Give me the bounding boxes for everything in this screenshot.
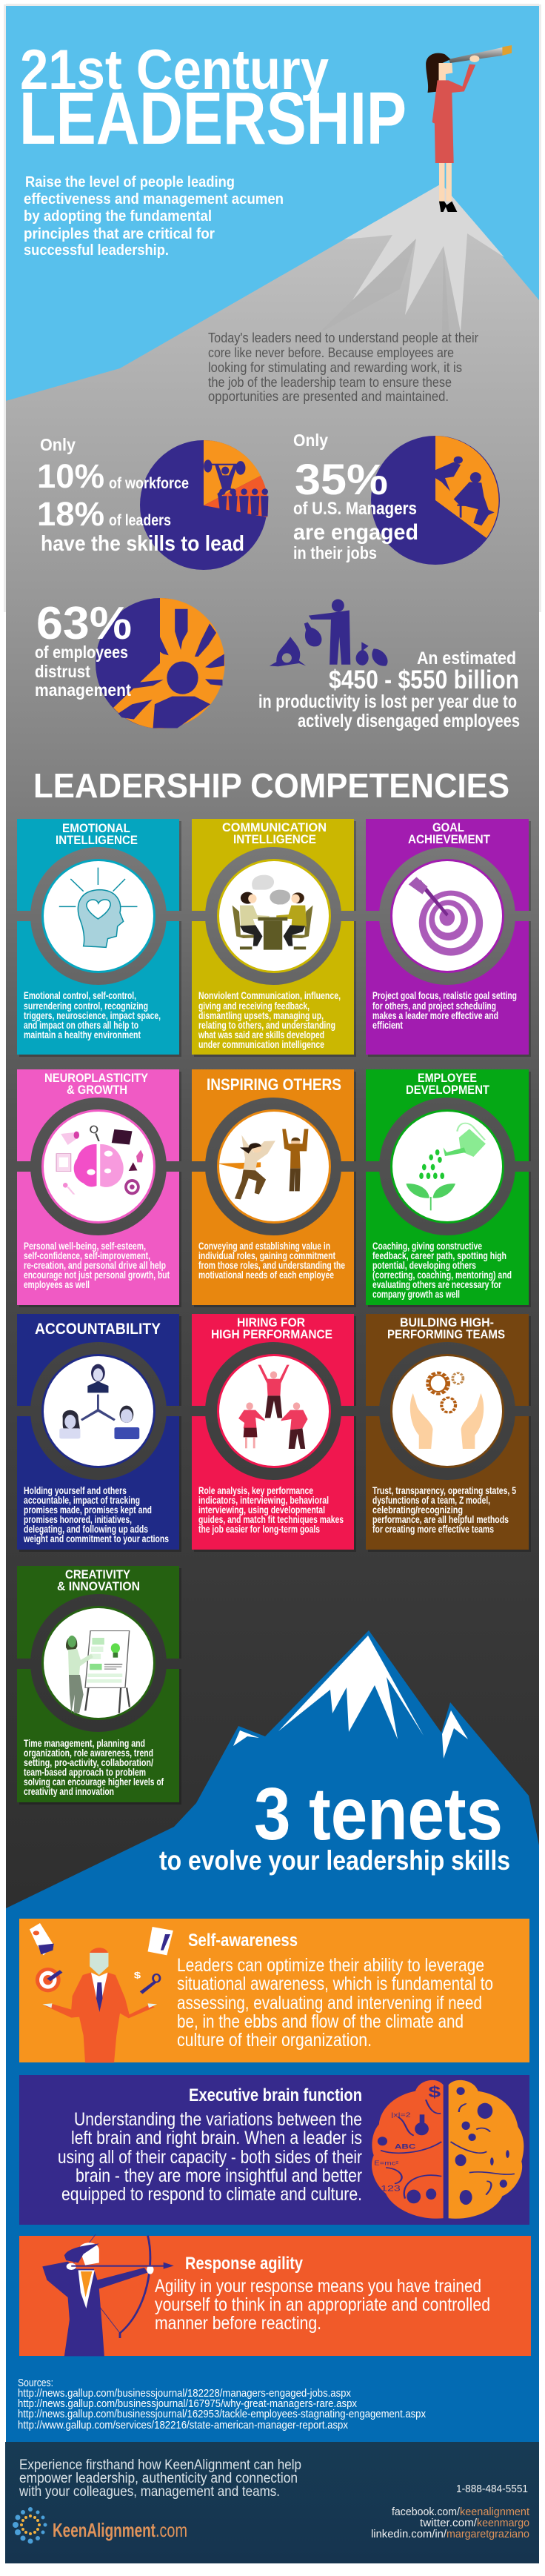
stat: 63%: of employees	[35, 643, 128, 662]
icon: disengaged figures	[435, 457, 495, 525]
body text: feedback, career path, spotting high	[372, 1250, 506, 1261]
icon: presenter at flipchart	[66, 1631, 130, 1713]
icon: two-sided brain: $	[428, 2082, 441, 2101]
body text: giving and receiving feedback,	[198, 1000, 310, 1012]
body text: makes a leader more effective and	[372, 1010, 498, 1021]
icon: two-sided brain: ABC	[395, 2143, 415, 2151]
body text: culture of their organization.	[177, 2030, 372, 2051]
heading: ACCOUNTABILITY	[35, 1321, 161, 1338]
body text: encourage not just personal growth, but	[24, 1269, 170, 1281]
sources: http://www.gallup.com/services/182216/state-american-manager-report.aspx	[18, 2419, 348, 2431]
body text: team-based approach to problem	[24, 1767, 146, 1778]
heading	[211, 1315, 332, 1341]
pie chart: skills to lead	[140, 440, 268, 570]
heading: BUILDING HIGH-	[400, 1315, 494, 1330]
heading: GOAL	[432, 820, 464, 834]
call to action	[19, 2457, 301, 2500]
intro text: Raise the level of people leading	[25, 174, 235, 190]
body text: creativity and innovation	[24, 1786, 114, 1797]
body text: Emotional control, self-control,	[24, 990, 136, 1001]
stat: 10% and 18%: have the skills to lead	[41, 532, 244, 556]
icon: archer	[42, 2234, 174, 2356]
intro text: principles that are critical for	[24, 226, 215, 242]
heading: & INNOVATION	[57, 1579, 140, 1593]
icon: watering can and plant	[406, 1123, 486, 1210]
body text: yourself to think in an appropriate and controlled	[155, 2294, 490, 2315]
body text	[23, 1485, 169, 1544]
body text: solving can encourage higher levels of	[24, 1776, 164, 1787]
stat: lost productivity: $450 - $550 billion	[329, 665, 519, 694]
body text: company growth as well	[372, 1289, 460, 1300]
heading	[222, 820, 327, 846]
stat: 10% and 18%	[37, 435, 244, 556]
panel: response agility	[19, 2234, 531, 2356]
body text: Time management, planning and	[24, 1738, 145, 1749]
body text: employees as well	[24, 1279, 90, 1290]
stat: 10% and 18%: of leaders	[109, 512, 171, 529]
call to action: empower leadership, authenticity and connection	[19, 2471, 298, 2486]
body text: Holding yourself and others	[24, 1485, 127, 1496]
heading: Executive brain function	[189, 2085, 362, 2105]
logo wordmark: KeenAlignment	[53, 2519, 156, 2541]
heading: 3 tenets	[159, 1773, 510, 1876]
social links: keenmargo	[477, 2517, 529, 2529]
intro text: by adopting the fundamental	[24, 208, 212, 225]
body text	[24, 1241, 170, 1290]
panel: hiring for high performance	[192, 1314, 356, 1552]
body text: left brain and right brain. When a leader is	[71, 2128, 362, 2148]
body text: Role analysis, key performance	[198, 1485, 313, 1496]
panel: footer	[5, 2442, 539, 2563]
body text	[198, 1241, 345, 1281]
intro text	[24, 174, 284, 259]
body text: Understanding the variations between the	[74, 2109, 362, 2130]
heading: PERFORMING TEAMS	[387, 1327, 505, 1341]
call to action: Experience firsthand how KeenAlignment can help	[19, 2457, 301, 2473]
heading: HIRING FOR	[237, 1315, 305, 1330]
grey paragraph: the job of the leadership team to ensure these	[208, 375, 452, 390]
heading: INSPIRING OTHERS	[207, 1075, 341, 1094]
stat: 35%: of U.S. Managers	[293, 499, 417, 519]
icon: target and arrow	[409, 877, 483, 956]
icon: human pyramid	[238, 1365, 308, 1449]
body text: guides, and match fit techniques makes	[198, 1514, 344, 1525]
icon: two-sided brain: |x|=2	[391, 2111, 411, 2119]
body text: for others, and project scheduling	[372, 1000, 496, 1012]
sources: http://news.gallup.com/businessjournal/162953/tackle-employees-stagnating-engagement.aspx	[18, 2408, 426, 2420]
stat: 35%: are engaged	[293, 520, 418, 545]
body text: potential, developing others	[372, 1260, 476, 1271]
body text: accountable, impact of tracking	[24, 1495, 140, 1506]
call to action: with your colleagues, management and teams.	[19, 2484, 280, 2500]
body text	[372, 1485, 516, 1535]
stat: 63%: distrust	[35, 662, 90, 681]
icon: head with heart	[59, 868, 137, 947]
panel: accountability	[17, 1314, 181, 1552]
heading: Self-awareness	[188, 1931, 298, 1951]
body text: individual roles, gaining commitment	[198, 1250, 335, 1261]
sources: http://news.gallup.com/businessjournal/167975/why-great-managers-rare.aspx	[18, 2397, 357, 2410]
panel: goal achievement	[366, 819, 531, 1057]
icon: businessman juggling objects	[30, 1923, 173, 2062]
panel: creativity and innovation	[17, 1566, 181, 1805]
panel: building high-performing teams	[366, 1314, 531, 1552]
body text	[198, 990, 341, 1050]
grey paragraph: opportunities are presented and maintained.	[208, 389, 449, 404]
intro text: effectiveness and management acumen	[24, 191, 284, 208]
body text	[155, 2276, 490, 2334]
body text: Agility in your response means you have trained	[155, 2276, 481, 2297]
title: LEADERSHIP	[19, 77, 407, 160]
body text	[372, 990, 517, 1031]
body text	[24, 1738, 164, 1797]
body text: setting, pro-activity, collaboration/	[24, 1757, 153, 1768]
heading	[387, 1315, 505, 1341]
stat: lost productivity: An estimated	[417, 648, 516, 668]
heading: INTELLIGENCE	[56, 833, 138, 847]
icon: brain and objects	[56, 1126, 143, 1195]
icon: celebrating people	[217, 1129, 308, 1199]
stat: lost productivity	[258, 648, 520, 731]
body text: delegating, and following up adds	[24, 1524, 148, 1535]
heading	[56, 821, 138, 847]
stat: 63%: 63%	[36, 598, 132, 649]
social links: facebook.com/	[392, 2506, 461, 2518]
body text: motivational needs of each employee	[198, 1269, 334, 1281]
icon: conversation at a table	[233, 875, 313, 950]
body text: surrendering control, recognizing	[24, 1000, 148, 1012]
panel: self-awareness	[19, 1919, 529, 2062]
stat: 10% and 18%: 18%	[37, 495, 104, 533]
icon: pointed-at manager	[118, 609, 224, 728]
heading: COMMUNICATION	[222, 820, 327, 834]
heading	[406, 1071, 490, 1097]
body text: interviewing, using developmental	[198, 1504, 325, 1516]
phone number: 1-888-484-5551	[456, 2483, 528, 2495]
pie chart: engaged managers	[371, 436, 500, 565]
body text: promises honored, initiatives,	[24, 1514, 132, 1525]
body text: Leaders can optimize their ability to leverage	[177, 1955, 484, 1976]
panel: inspiring others	[192, 1069, 356, 1307]
body text	[177, 1955, 493, 2051]
body text: evaluating others are necessary for	[372, 1279, 502, 1290]
body text: promises made, promises kept and	[24, 1504, 152, 1516]
sky background	[6, 6, 539, 421]
body text: indicators, interviewing, behavioral	[198, 1495, 329, 1506]
body text: brain - they are more insightful and better	[76, 2165, 362, 2186]
icon: gears held by hands	[410, 1372, 484, 1449]
heading: EMPLOYEE	[418, 1071, 477, 1085]
icon: three connected people	[59, 1364, 139, 1439]
panel: neuroplasticity and growth	[17, 1069, 181, 1307]
body text: the job easier for long-term goals	[198, 1524, 320, 1535]
body text: efficient	[372, 1020, 403, 1031]
body text: Personal well-being, self-esteem,	[24, 1241, 146, 1252]
body text: celebrating/recognizing	[372, 1504, 463, 1516]
social links	[371, 2506, 530, 2540]
body text: equipped to respond to climate and culture.	[61, 2184, 362, 2205]
heading	[57, 1567, 140, 1593]
body text: maintain a healthy environment	[24, 1029, 141, 1040]
blue mountain	[6, 1630, 539, 2446]
heading: HIGH PERFORMANCE	[211, 1327, 332, 1341]
icon: two-sided brain: 123	[381, 2183, 401, 2193]
body text: organization, role awareness, trend	[24, 1747, 153, 1759]
grey paragraph: looking for stimulating and rewarding work, it is	[208, 360, 462, 375]
stat: 63%	[35, 598, 132, 700]
grey paragraph	[208, 331, 478, 404]
icon: two-sided brain: E=mc²	[374, 2160, 399, 2167]
social links: twitter.com/	[420, 2517, 478, 2529]
panel: executive brain function	[19, 2075, 529, 2225]
body text	[372, 1241, 512, 1300]
panel: emotional intelligence	[17, 819, 181, 1057]
body text: Conveying and establishing value in	[198, 1241, 330, 1252]
sources	[18, 2377, 426, 2431]
heading: Response agility	[185, 2254, 304, 2274]
body text: triggers, neuroscience, impact space,	[24, 1010, 161, 1021]
logo wordmark: .com	[156, 2519, 187, 2541]
heading	[408, 820, 491, 846]
stat: 35%	[293, 431, 418, 562]
social links: keenalignment	[460, 2506, 530, 2518]
body text: weight and commitment to your actions	[23, 1533, 169, 1544]
body text	[58, 2109, 362, 2205]
stat: 10% and 18%: of workforce	[109, 475, 189, 492]
body text: what was said are skills developed	[198, 1029, 324, 1040]
body text: manner before reacting.	[155, 2313, 321, 2334]
heading: ACHIEVEMENT	[408, 832, 491, 846]
body text: under communication intelligence	[198, 1039, 324, 1050]
intro text: successful leadership.	[24, 242, 169, 259]
heading: INTELLIGENCE	[233, 832, 316, 846]
social links: linkedin.com/in/	[371, 2528, 447, 2540]
heading: DEVELOPMENT	[406, 1083, 490, 1097]
heading: leadership competencies: LEADERSHIP COMPETENCIES	[33, 766, 509, 805]
body text: dysfunctions of a team, Z model,	[372, 1495, 490, 1506]
stat: 35%: Only	[293, 431, 328, 450]
page background gradient	[6, 419, 539, 1931]
body text: assessing, evaluating and intervening if need	[177, 1993, 482, 2014]
sources: http://news.gallup.com/businessjournal/182228/managers-engaged-jobs.aspx	[18, 2387, 351, 2400]
body text: Nonviolent Communication, influence,	[198, 990, 341, 1001]
stat: 35%: 35%	[295, 456, 388, 504]
title: 21st Century	[20, 39, 329, 102]
heading: & GROWTH	[67, 1083, 127, 1097]
grey paragraph: Today's leaders need to understand people at their	[208, 331, 478, 345]
heading: EMOTIONAL	[62, 821, 130, 835]
icon: two-sided brain	[372, 2080, 524, 2219]
heading	[44, 1071, 149, 1097]
icon: businessman juggling objects: $	[134, 1971, 141, 1981]
body text: Coaching, giving constructive	[372, 1241, 482, 1252]
stat: 63%: management	[35, 680, 131, 700]
body text: from those roles, and understanding the	[198, 1260, 345, 1271]
heading: NEUROPLASTICITY	[44, 1071, 149, 1085]
grey paragraph: core like never before. Because employees are	[208, 345, 454, 360]
social links: margaretgraziano	[447, 2528, 529, 2540]
stat: 10% and 18%: 10%	[37, 457, 104, 495]
sources: Sources:	[18, 2377, 53, 2389]
body text: using all of their capacity - both sides of their	[58, 2147, 362, 2168]
body text: performance, are all helpful methods	[372, 1514, 509, 1525]
body text: self-confidence, self-improvement,	[24, 1250, 150, 1261]
body text	[24, 990, 161, 1040]
icon: burning money	[270, 600, 388, 666]
body text: dismantling upsets, managing up,	[198, 1010, 324, 1021]
panel: communication intelligence	[192, 819, 356, 1057]
pie chart: distrust	[96, 598, 225, 728]
title	[19, 39, 407, 160]
grey mountain	[6, 184, 539, 422]
body text: be, in the ebbs and flow of the climate and	[177, 2011, 464, 2032]
body text: for creating more effective teams	[372, 1524, 494, 1535]
illustration: woman with spyglass	[426, 45, 512, 212]
body text: and impact on others all help to	[24, 1020, 138, 1031]
stat: 10% and 18%: Only	[40, 435, 76, 454]
body text: re-creation, and personal drive all help	[24, 1260, 166, 1271]
stat: 35%: in their jobs	[293, 543, 377, 562]
body text: relating to others, and understanding	[198, 1020, 335, 1031]
body text	[198, 1485, 344, 1535]
icon: weightlifter and crowd	[204, 459, 268, 517]
heading: 3 tenets: 3 tenets	[254, 1773, 503, 1856]
panel: employee development	[366, 1069, 531, 1307]
heading: CREATIVITY	[65, 1567, 131, 1581]
icon: logo mark	[13, 2507, 47, 2543]
